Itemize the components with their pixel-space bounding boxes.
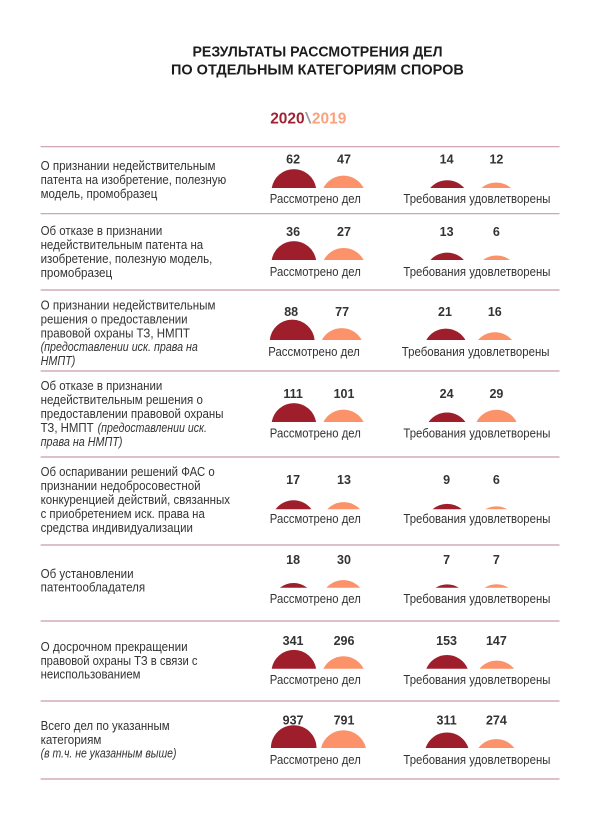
chart: cases considered: Рассмотрено дел (270, 426, 361, 440)
category text (41, 465, 231, 535)
category text (41, 298, 215, 368)
chart: claims satisfied: 6 (493, 473, 500, 487)
chart: claims satisfied (403, 152, 550, 206)
chart: cases considered: Рассмотрено дел (270, 673, 361, 687)
category text: признании недобросовестной (41, 479, 201, 493)
chart: claims satisfied (403, 225, 550, 279)
chart: cases considered: 30 (337, 553, 351, 567)
chart: claims satisfied (403, 473, 550, 526)
chart: cases considered: 101 (334, 387, 354, 401)
category text (41, 640, 197, 682)
category text: патента на изобретение, полезную (41, 173, 226, 187)
chart: cases considered (270, 553, 361, 606)
legend: years 2020 and 2019 (270, 110, 346, 128)
chart: claims satisfied: 147 (486, 634, 507, 648)
chart: claims satisfied: 29 (489, 387, 503, 401)
category text: правовой охраны ТЗ в связи с (41, 654, 197, 668)
category text: (в т.ч. не указанным выше) (41, 746, 176, 760)
chart: cases considered: 791 (334, 714, 354, 728)
category text: Об оспаривании решений ФАС о (41, 465, 215, 479)
chart: claims satisfied: Требования удовлетворены (403, 192, 550, 206)
chart: claims satisfied (403, 553, 550, 606)
chart: cases considered: 18 (286, 553, 300, 567)
panel: row 6 (41, 553, 550, 606)
panel: row 3 (41, 298, 550, 368)
category text: Об установлении (41, 567, 134, 581)
chart: claims satisfied (402, 305, 550, 359)
category text: неиспользованием (41, 668, 140, 682)
chart: claims satisfied: 311 (437, 714, 457, 728)
category text: О признании недействительным (41, 298, 215, 312)
legend: years 2020 and 2019: \ (305, 110, 312, 128)
chart: cases considered: 17 (286, 473, 300, 487)
chart: claims satisfied: 13 (440, 225, 454, 239)
chart: cases considered: 27 (337, 225, 351, 239)
chart: cases considered (270, 152, 364, 206)
chart: cases considered: Рассмотрено дел (270, 592, 361, 606)
category text: предоставлении правовой охраны (41, 407, 224, 421)
category text: правовой охраны ТЗ, НМПТ (41, 326, 190, 340)
chart: claims satisfied: Требования удовлетворены (403, 592, 550, 606)
category text: патентообладателя (41, 580, 145, 594)
category text (41, 719, 176, 760)
chart: cases considered (270, 225, 364, 279)
chart: cases considered: 36 (286, 225, 300, 239)
category text: изобретение, полезную модель, (41, 252, 212, 266)
chart: claims satisfied: 21 (438, 305, 452, 319)
chart: claims satisfied: 6 (493, 225, 500, 239)
chart: claims satisfied: 16 (488, 305, 502, 319)
panel: row 7 (41, 634, 550, 687)
title: РЕЗУЛЬТАТЫ РАССМОТРЕНИЯ ДЕЛ (192, 44, 442, 60)
category text: Всего дел по указанным (41, 719, 170, 733)
chart: claims satisfied: 12 (489, 152, 503, 166)
category text (41, 379, 224, 449)
category text: ТЗ, НМПТ (41, 421, 94, 435)
chart: cases considered: 341 (283, 634, 304, 648)
chart: claims satisfied: Требования удовлетворены (403, 512, 550, 526)
category text: О досрочном прекращении (41, 640, 188, 654)
chart: claims satisfied (403, 634, 550, 687)
chart: claims satisfied: 14 (440, 152, 454, 166)
chart: cases considered: Рассмотрено дел (270, 192, 361, 206)
chart: claims satisfied (403, 714, 550, 767)
chart: cases considered (268, 305, 362, 359)
chart: cases considered: 111 (283, 387, 303, 401)
chart: cases considered (270, 634, 364, 687)
panel: row 2 (41, 224, 550, 280)
chart: claims satisfied: Требования удовлетворены (402, 345, 550, 359)
category text: (предоставлении иск. права на (41, 340, 198, 354)
panel: row 4 (41, 379, 550, 449)
chart: claims satisfied (403, 387, 550, 440)
category text: О признании недействительным (41, 159, 215, 173)
category text: Об отказе в признании (41, 224, 162, 238)
category text: недействительным решения о (41, 393, 203, 407)
category text: конкуренцией действий, связанных (41, 493, 231, 507)
chart: claims satisfied: Требования удовлетворены (403, 673, 550, 687)
chart: claims satisfied: 274 (486, 714, 507, 728)
chart: cases considered (270, 387, 364, 440)
chart: cases considered: 937 (283, 714, 304, 728)
panel: row 5 (41, 465, 550, 535)
title: ПО ОТДЕЛЬНЫМ КАТЕГОРИЯМ СПОРОВ (171, 61, 464, 78)
panel: row 8 total (41, 714, 550, 767)
chart: claims satisfied: Требования удовлетворены (403, 426, 550, 440)
category text (41, 159, 226, 201)
panel: row 1 (41, 152, 550, 206)
chart: cases considered: Рассмотрено дел (270, 753, 361, 767)
category text: модель, промобразец (41, 187, 157, 201)
chart: cases considered: 296 (334, 634, 354, 648)
category text: недействительным патента на (41, 238, 203, 252)
category text (41, 567, 145, 594)
chart: claims satisfied: 7 (493, 553, 500, 567)
chart: cases considered: Рассмотрено дел (270, 265, 361, 279)
category text: промобразец (41, 266, 112, 280)
chart: cases considered: 13 (337, 473, 351, 487)
category text: решения о предоставлении (41, 312, 188, 326)
chart: cases considered: Рассмотрено дел (270, 512, 361, 526)
category text (41, 224, 212, 280)
chart: claims satisfied: 9 (443, 473, 450, 487)
chart: claims satisfied: 153 (436, 634, 457, 648)
legend: years 2020 and 2019: 2020 (270, 110, 305, 128)
chart: cases considered: 47 (337, 152, 351, 166)
chart: claims satisfied: Требования удовлетворены (403, 265, 550, 279)
chart: claims satisfied: 7 (443, 553, 450, 567)
category text: (предоставлении иск. (98, 421, 207, 435)
chart: claims satisfied: 24 (440, 387, 454, 401)
category text: категориям (41, 733, 101, 747)
chart: cases considered: 77 (335, 305, 349, 319)
chart: claims satisfied: Требования удовлетворены (403, 753, 550, 767)
category text: Об отказе в признании (41, 379, 162, 393)
category text: права на НМПТ) (41, 435, 122, 449)
chart: cases considered (270, 714, 366, 767)
category text: с приобретением иск. права на (41, 507, 205, 521)
chart: cases considered: 88 (284, 305, 298, 319)
chart: cases considered: 62 (286, 152, 300, 166)
title (171, 44, 464, 78)
chart: cases considered (270, 473, 361, 526)
category text: средства индивидуализации (41, 521, 193, 535)
chart: cases considered: Рассмотрено дел (268, 345, 360, 359)
legend: years 2020 and 2019: 2019 (312, 110, 346, 128)
category text: НМПТ) (41, 354, 75, 368)
